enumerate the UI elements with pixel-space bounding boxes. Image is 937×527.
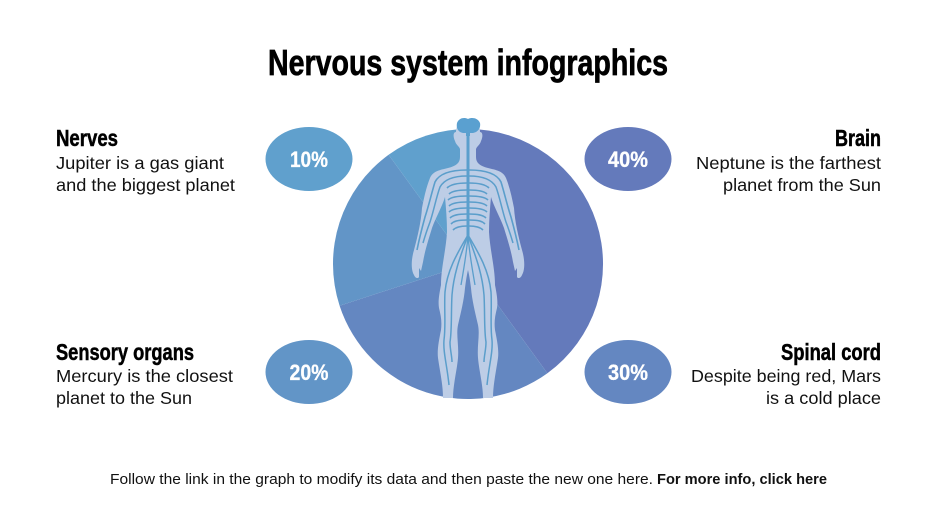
footer note: Follow the link in the graph to modify its data and then paste the new one here. — [110, 472, 653, 488]
badge: 20%: 20% — [290, 360, 328, 385]
text block: nerves: and the biggest planet — [56, 175, 235, 195]
text block: brain: Brain — [835, 125, 881, 151]
badge: 40%: 40% — [608, 147, 648, 172]
pie chart with body figure — [333, 118, 603, 399]
icon: human body — [412, 118, 524, 398]
pie slice: nerves 10% — [389, 129, 468, 264]
icon: brain — [457, 118, 480, 136]
badge: 40% — [584, 127, 672, 191]
text block: spinal cord: Spinal cord — [781, 339, 881, 365]
text block: brain — [696, 125, 881, 195]
badge: 10% — [266, 127, 352, 191]
text block: brain: planet from the Sun — [723, 175, 881, 195]
footer note: For more info, click here — [657, 472, 827, 488]
badge: 20% — [266, 340, 352, 404]
text block: nerves — [56, 125, 235, 195]
pie slice: spinal cord 30% — [340, 264, 547, 399]
text block: sensory organs: planet to the Sun — [56, 388, 192, 408]
pie slice: sensory organs 20% — [333, 155, 468, 306]
text block: sensory organs: Sensory organs — [56, 339, 194, 365]
text block: spinal cord: Despite being red, Mars — [691, 366, 881, 386]
text block: spinal cord — [691, 339, 881, 408]
text block: sensory organs — [56, 339, 233, 408]
spinal cord line — [466, 133, 470, 236]
badge: 30% — [584, 340, 672, 404]
text block: nerves: Jupiter is a gas giant — [56, 153, 224, 173]
text block: nerves: Nerves — [56, 125, 118, 151]
badge: 10%: 10% — [290, 147, 328, 172]
title: Nervous system infographics — [268, 42, 668, 83]
pie slice: brain 40% — [468, 129, 603, 373]
text block: spinal cord: is a cold place — [766, 388, 881, 408]
text block: brain: Neptune is the farthest — [696, 153, 881, 173]
text block: sensory organs: Mercury is the closest — [56, 366, 233, 386]
badge: 30%: 30% — [608, 360, 648, 385]
